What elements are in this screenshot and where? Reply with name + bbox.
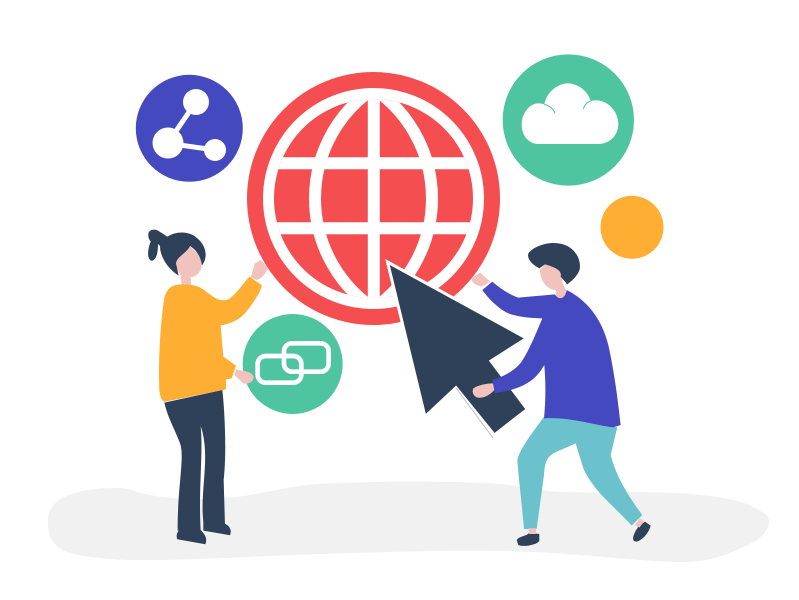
woman shoes	[177, 522, 231, 544]
woman hands and face	[176, 246, 268, 384]
man shoes	[517, 522, 651, 546]
man sweater	[482, 282, 621, 427]
man skin	[472, 264, 644, 534]
man trousers	[517, 417, 642, 529]
icon: arrow cursor	[388, 262, 527, 438]
icon: orange dot	[600, 196, 664, 259]
man hair	[528, 243, 580, 284]
icon: globe	[255, 80, 492, 320]
woman hair	[148, 230, 206, 276]
woman sweater	[159, 277, 262, 402]
character: woman	[148, 230, 268, 544]
woman trousers	[164, 390, 225, 531]
ground shadow	[48, 482, 769, 562]
illustration: people with internet icons	[48, 54, 769, 562]
icon: cloud	[503, 54, 634, 186]
icon: link chain	[243, 314, 343, 414]
icon: share nodes	[136, 75, 243, 182]
character: man	[472, 243, 651, 546]
